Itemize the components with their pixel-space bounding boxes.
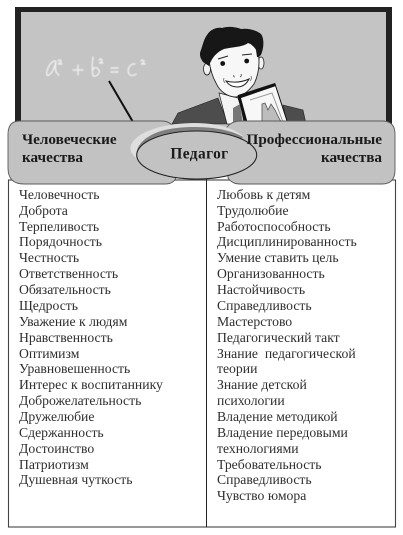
list: human qualities: Достоинство [19, 441, 94, 456]
list: professional qualities: Владение методикой [217, 409, 338, 424]
list: professional qualities: Педагогический такт [217, 330, 340, 345]
hair [200, 27, 263, 66]
list: human qualities: Терпеливость [19, 219, 99, 234]
list table [8, 176, 396, 527]
panel: professional qualities header [227, 121, 395, 184]
list: professional qualities: технологиями [217, 441, 299, 456]
teacher figure [172, 27, 306, 124]
list: professional qualities: Дисциплинированность [217, 234, 357, 249]
list: human qualities: Щедрость [19, 298, 78, 313]
list: human qualities: Дружелюбие [19, 409, 94, 424]
list: professional qualities: Справедливость [217, 298, 312, 313]
list: human qualities: Порядочность [19, 234, 102, 249]
list: human qualities: Душевная чуткость [19, 472, 133, 487]
pointer [109, 81, 133, 122]
list: professional qualities: Любовь к детям [217, 187, 311, 202]
list: human qualities: Патриотизм [19, 457, 89, 472]
suit [172, 98, 228, 124]
list: human qualities: Уравновешенность [19, 361, 130, 376]
list: professional qualities: Требовательность [217, 457, 322, 472]
list: human qualities: Уважение к людям [19, 314, 128, 329]
list: professional qualities: Чувство юмора [217, 488, 306, 503]
list: professional qualities: Настойчивость [217, 282, 305, 297]
heading: human qualities: Человеческие [22, 131, 117, 148]
nose and smile [234, 74, 241, 77]
central ellipse shadow [130, 123, 243, 160]
list: professional qualities: Владение передовыми [217, 425, 348, 440]
list: human qualities: Честность [19, 250, 79, 265]
central ellipse: teacher: Педагог [170, 146, 229, 162]
list: professional qualities: Умение ставить цель [217, 250, 339, 265]
heading: human qualities: качества [22, 149, 83, 166]
list: professional qualities: Знание педагогической [217, 346, 356, 361]
heading: professional qualities: качества [321, 149, 382, 166]
list: professional qualities: Мастерстово [217, 314, 292, 329]
list: human qualities: Ответственность [19, 266, 118, 281]
list: professional qualities: психологии [217, 393, 285, 408]
heading: professional qualities: Профессиональные [246, 131, 382, 148]
list: human qualities: Доброта [19, 203, 68, 218]
hand [262, 103, 284, 124]
list: professional qualities: теории [217, 361, 257, 376]
list: professional qualities: Организованность [217, 266, 325, 281]
list: human qualities: Оптимизм [19, 346, 80, 361]
list: professional qualities: Справедливость [217, 472, 312, 487]
list: professional qualities [217, 187, 357, 503]
panel: human qualities header [8, 121, 176, 184]
ears [204, 63, 210, 75]
list: professional qualities: Работоспособность [217, 219, 331, 234]
list: professional qualities: Знание детской [217, 377, 307, 392]
list: human qualities: Доброжелательность [19, 393, 141, 408]
list: human qualities: Человечность [19, 187, 99, 202]
list: human qualities [19, 187, 163, 487]
chalk formula [47, 57, 145, 76]
eyes and brows [220, 61, 225, 66]
book [238, 84, 288, 124]
central ellipse: teacher [137, 131, 257, 179]
list: human qualities: Обязательность [19, 282, 111, 297]
list: human qualities: Нравственность [19, 330, 113, 345]
face [209, 41, 259, 97]
list: professional qualities: Трудолюбие [217, 203, 289, 218]
list: human qualities: Интерес к воспитаннику [19, 377, 163, 392]
shirt and tie [219, 93, 246, 124]
chalkboard [15, 7, 392, 132]
list: human qualities: Сдержанность [19, 425, 104, 440]
